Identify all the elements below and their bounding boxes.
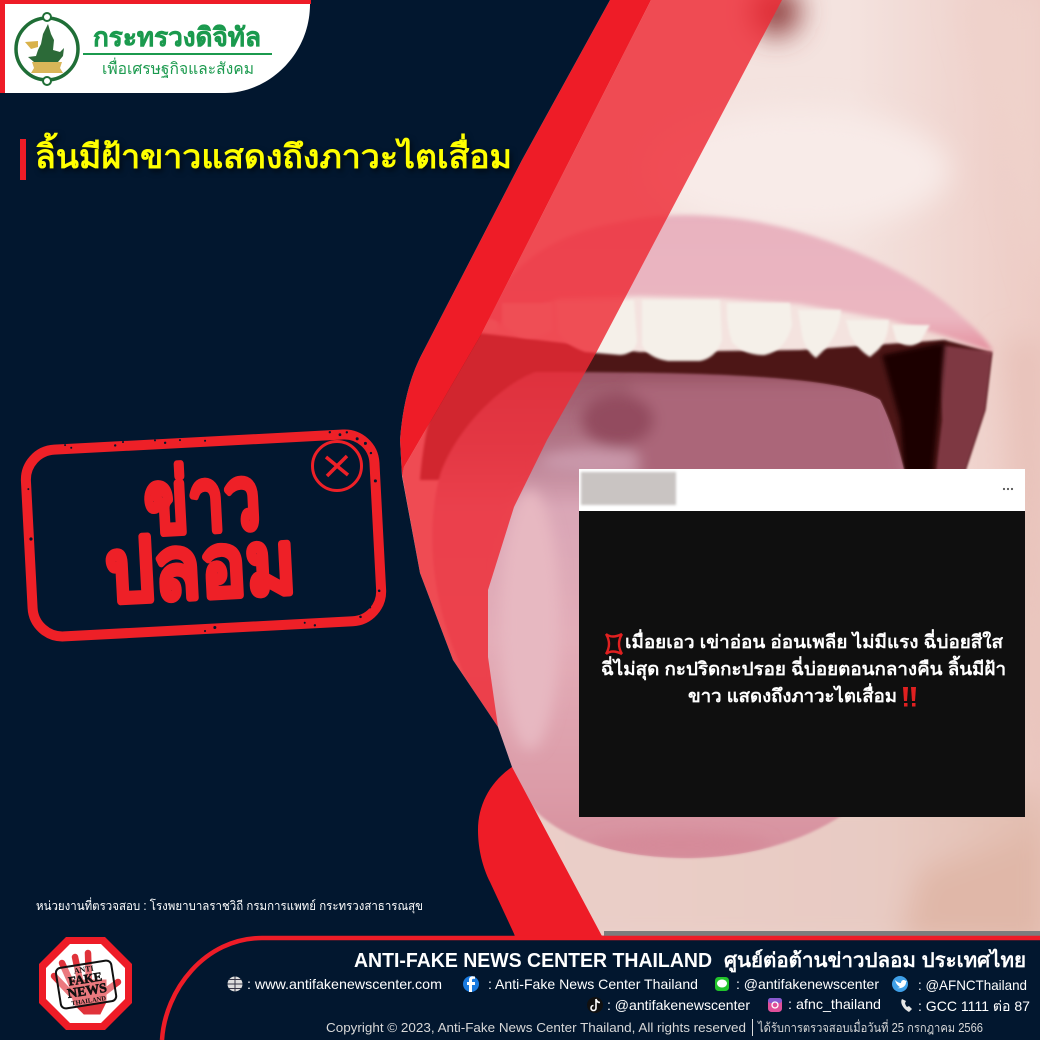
- footer heading: ศูนย์ต่อต้านข่าวปลอม ประเทศไทย: [724, 948, 1026, 974]
- post text line 2: ฉี่ไม่สุด กะปริดกะปรอย ฉี่บ่อยตอนกลางคืน ลิ้นมีฝ้า: [601, 655, 1006, 681]
- footer heading: [354, 948, 1026, 974]
- skin shading: [480, 0, 1040, 950]
- navy left panel: [0, 0, 610, 1040]
- title: ลิ้นมีฝ้าขาวแสดงถึงภาวะไตเสื่อม: [35, 132, 512, 175]
- source credit: หน่วยงานที่ตรวจสอบ : โรงพยาบาลราชวิถี กรมการแพทย์ กระทรวงสาธารณสุข: [36, 897, 423, 914]
- inner cheek: [935, 345, 992, 480]
- tongue: [432, 372, 930, 858]
- ministry tagline: เพื่อเศรษฐกิจและสังคม: [102, 57, 254, 78]
- facebook page: : Anti-Fake News Center Thailand: [488, 976, 698, 992]
- footer contacts: [228, 976, 1030, 1014]
- anti-fake news logo: [39, 937, 132, 1030]
- icon: facebook: [463, 976, 479, 992]
- instagram account: : afnc_thailand: [788, 996, 881, 1012]
- title accent bar: [20, 139, 26, 180]
- ministry name: กระทรวงดิจิทัล: [93, 22, 261, 52]
- anti-fake news logo: NEWS: [66, 980, 108, 1001]
- tiktok account: : @antifakenewscenter: [607, 997, 750, 1013]
- hotline: : GCC 1111 ต่อ 87: [918, 998, 1030, 1014]
- social post card: [579, 469, 1025, 817]
- stamp wear: [25, 428, 384, 641]
- fake news stamp: [24, 428, 384, 641]
- photo: open mouth with white-coated tongue: [400, 0, 1040, 950]
- icon: line: [715, 977, 729, 991]
- footer heading: ANTI-FAKE NEWS CENTER THAILAND: [354, 950, 712, 972]
- throat shadow: [882, 342, 945, 480]
- icon: phone: [901, 999, 912, 1012]
- icon: twitter: [892, 976, 908, 992]
- icon: instagram: [768, 998, 782, 1012]
- blurred account name: [581, 472, 676, 505]
- red lobe lower-left of chin: [478, 767, 603, 938]
- icon: tiktok: [587, 997, 603, 1013]
- photo bottom strip: [604, 931, 1040, 936]
- stamp text line 2: ปลอม: [103, 512, 298, 621]
- ministry logo panel: [0, 0, 311, 93]
- anger icon: [606, 634, 622, 654]
- post text line 1: เมื่อยเอว เข่าอ่อน อ่อนเพลีย ไม่มีแรง ฉี่บ่อยสีใส: [625, 629, 1004, 652]
- menu dots: [1003, 488, 1013, 490]
- post text line 3: ขาว แสดงถึงภาวะไตเสื่อม: [688, 683, 897, 706]
- copyright: Copyright © 2023, Anti-Fake News Center Thailand, All rights reserved: [326, 1020, 746, 1035]
- anti-fake news logo: FAKE: [67, 970, 103, 989]
- tongue mottling: [500, 385, 910, 857]
- icon: globe: [228, 976, 242, 992]
- stamp x icon: [312, 442, 362, 490]
- hand: [54, 953, 118, 1014]
- logo wording: ANTI: [73, 964, 94, 976]
- double exclamation icon: [903, 687, 916, 706]
- upper lip: [478, 215, 993, 352]
- stamp text line 1: ข่าว: [142, 448, 263, 553]
- emblem: [16, 13, 78, 85]
- bottom navy footer: [0, 936, 1040, 1040]
- mouth cavity: [420, 332, 992, 480]
- teeth: [480, 300, 930, 361]
- translucent red band: [402, 0, 782, 727]
- anti-fake news logo: THAILAND: [71, 995, 107, 1007]
- solid red band: [400, 0, 651, 476]
- website: : www.antifakenewscenter.com: [247, 976, 442, 992]
- footer red curve line: [162, 938, 1040, 1040]
- verification date: ได้รับการตรวจสอบเมื่อวันที่ 25 กรกฎาคม 2566: [757, 1019, 983, 1035]
- twitter account: : @AFNCThailand: [918, 977, 1027, 993]
- line account: : @antifakenewscenter: [736, 976, 879, 992]
